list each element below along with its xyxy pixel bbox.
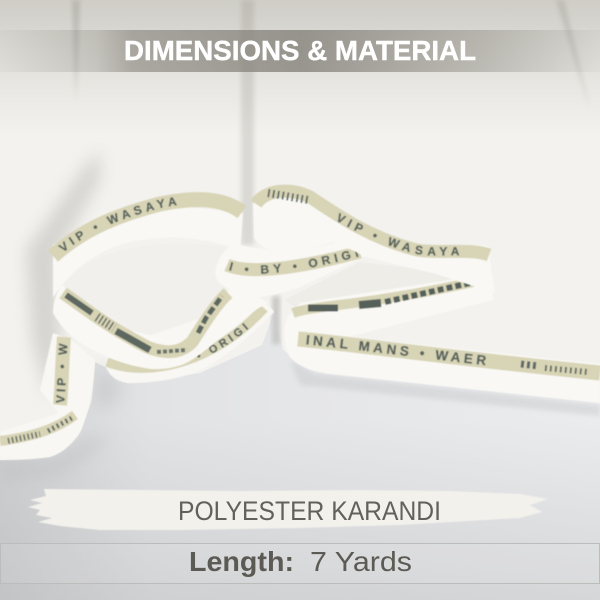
fabric: right hem with patterned band: [284, 276, 493, 350]
fabric: centre lobe with BY ORIGI band: I • BY • ORIGI: [228, 250, 359, 274]
length label: Length:: [189, 546, 294, 577]
fabric: left vertical strip: [40, 333, 95, 430]
fabric: bottom left corner band: [0, 408, 83, 460]
material label: [28, 489, 548, 530]
length value: 7 Yards: [310, 546, 412, 577]
fabric: front right hem with MANS WAER band: INAL MANS • WAER: [306, 334, 486, 366]
fabric: main cloth: [0, 0, 600, 460]
fabric: centre lobe with BY ORIGI band: [224, 246, 362, 295]
fabric: front right hem with MANS WAER band: [288, 331, 600, 402]
fabric: inner cup of left drape: [53, 243, 240, 350]
fabric: top right hem with WASAYA band: [250, 184, 492, 286]
fabric: right inner weave: [284, 262, 470, 310]
fabric: top left hem with WASAYA band: VIP • WASAYA: [58, 196, 178, 252]
fabric: top left hem with WASAYA band: [48, 192, 246, 298]
top shading: [0, 0, 600, 135]
title banner: [0, 30, 600, 72]
fabric: under lobe with ORIGI band: • ORIGI: [196, 322, 249, 358]
fabric: top right hem with WASAYA band: VIP • WASAYA: [338, 212, 460, 256]
fabric: left vertical strip: VIP • W: [55, 342, 68, 404]
fabric: under lobe with ORIGI band: [105, 306, 274, 384]
title: DIMENSIONS & MATERIAL: [124, 35, 476, 66]
fabric: fold shadows: [0, 0, 600, 480]
length box: [0, 544, 600, 584]
material name: POLYESTER KARANDI: [178, 496, 441, 526]
fabric: front hem with patterned band: [53, 285, 268, 369]
